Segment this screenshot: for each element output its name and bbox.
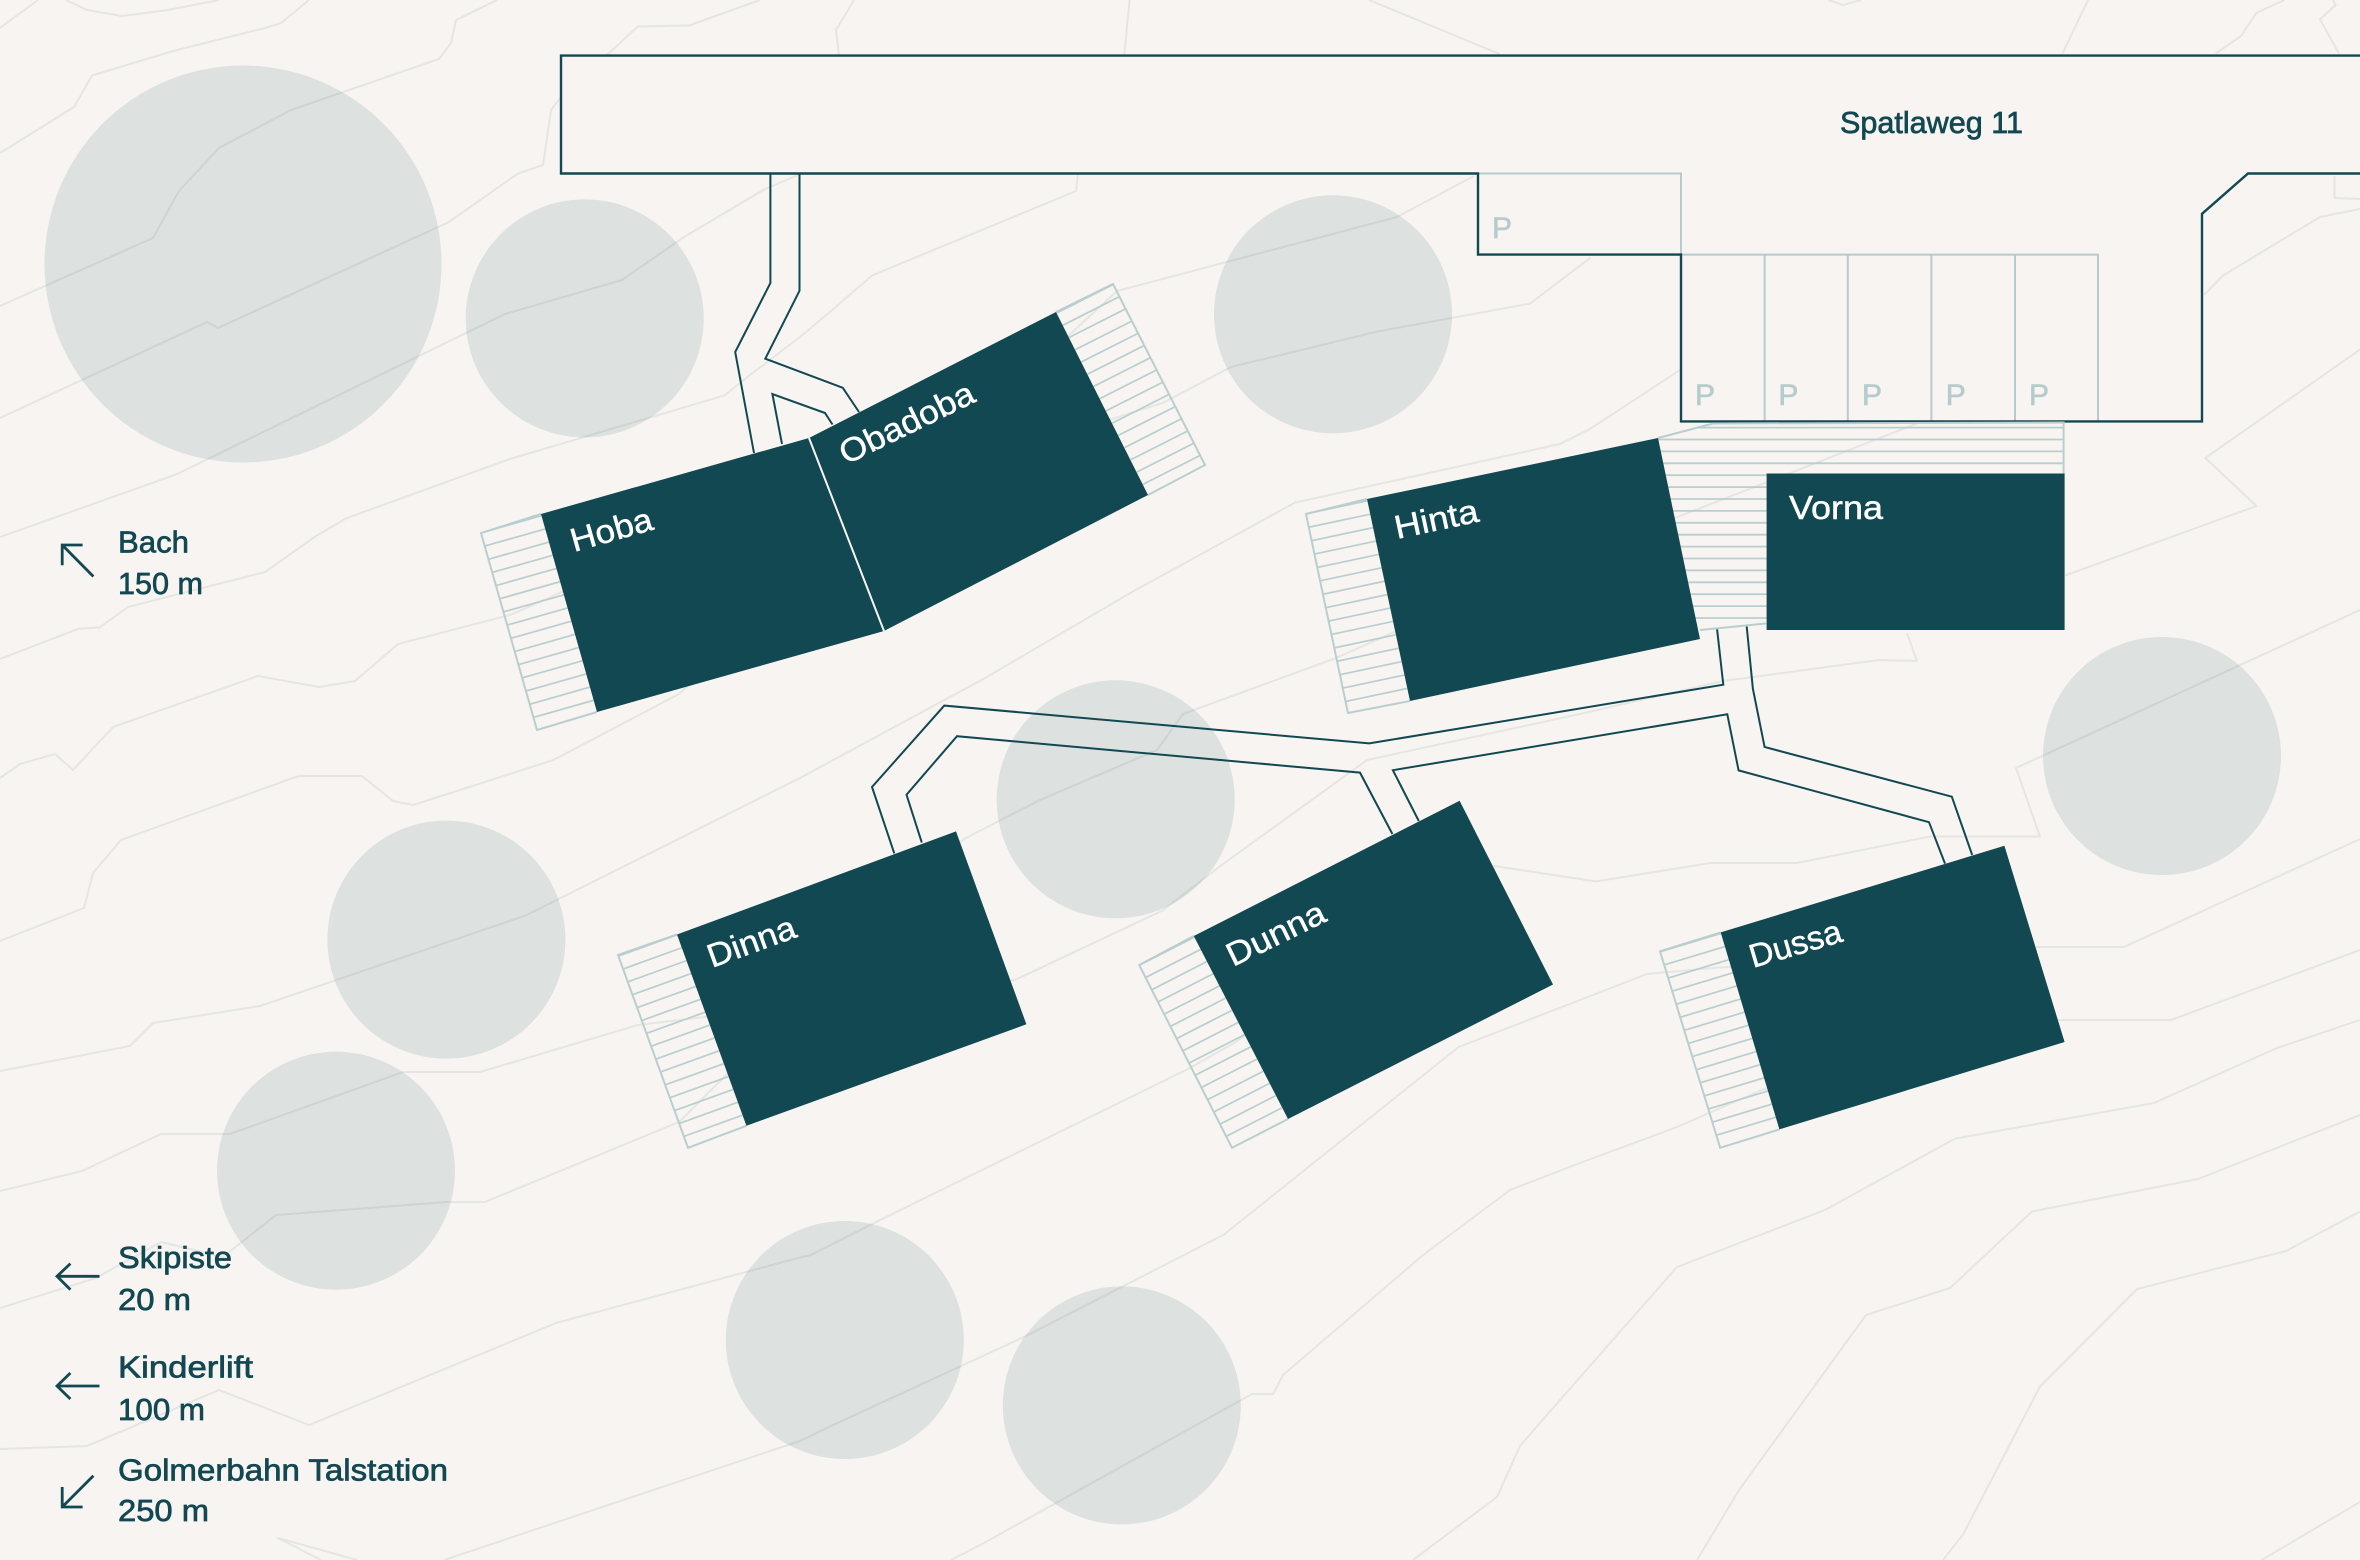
direction: Golmerbahn Talstation: 250 m: [118, 1493, 209, 1528]
footpaths: [735, 174, 1972, 864]
building: Dunna: Dunna: [1220, 893, 1332, 973]
direction: Golmerbahn Talstation: Golmerbahn Talstation: [118, 1452, 448, 1487]
terrace: Obadoba: [1056, 284, 1205, 495]
building: Dunna: [1194, 801, 1553, 1119]
terrace: Dunna: [1139, 936, 1288, 1148]
building: Obadoba: [809, 312, 1148, 631]
terrace: Dussa: [1660, 932, 1779, 1148]
direction: Kinderlift: 100 m: [118, 1392, 205, 1427]
building: Vorna: Vorna: [1789, 489, 1884, 526]
building: Hoba: Hoba: [566, 500, 657, 559]
direction: Bach: [62, 525, 203, 601]
road: Spatlaweg with parking area: [561, 56, 2360, 421]
direction: Skipiste: Skipiste: [118, 1240, 232, 1275]
direction: Kinderlift: [57, 1349, 253, 1427]
terrace: Hoba: [481, 514, 597, 730]
street name: Spatlaweg 11: [1840, 105, 2023, 140]
building: Hoba: [541, 438, 884, 712]
direction: Golmerbahn Talstation: [62, 1452, 448, 1528]
building: Obadoba: Obadoba: [833, 374, 981, 471]
building: Dussa: [1721, 846, 2065, 1129]
parking labels: P: [1695, 379, 1715, 412]
building: Dussa: Dussa: [1744, 912, 1847, 975]
building: Dinna: [677, 831, 1026, 1126]
parking labels: P: [1778, 379, 1798, 412]
building: Hinta: [1367, 438, 1700, 701]
direction: Bach: Bach: [118, 525, 189, 560]
terrace: Dinna: [618, 934, 746, 1148]
parking labels: [1492, 212, 2049, 412]
direction: Kinderlift: Kinderlift: [118, 1349, 253, 1384]
parking labels: P: [1946, 379, 1966, 412]
building: Dinna: Dinna: [702, 908, 801, 975]
direction: Bach: 150 m: [118, 566, 203, 601]
terrace: Hinta: [1306, 499, 1410, 713]
building: Vorna: [1767, 474, 2065, 630]
parking labels: P: [1492, 212, 1512, 245]
parking labels: P: [1862, 379, 1882, 412]
parking labels: P: [2029, 379, 2049, 412]
direction: Skipiste: 20 m: [118, 1282, 191, 1317]
direction: Skipiste: [57, 1240, 232, 1317]
terrace: between Hinta and Vorna: [1655, 422, 2064, 630]
building: Hinta: Hinta: [1391, 492, 1482, 546]
